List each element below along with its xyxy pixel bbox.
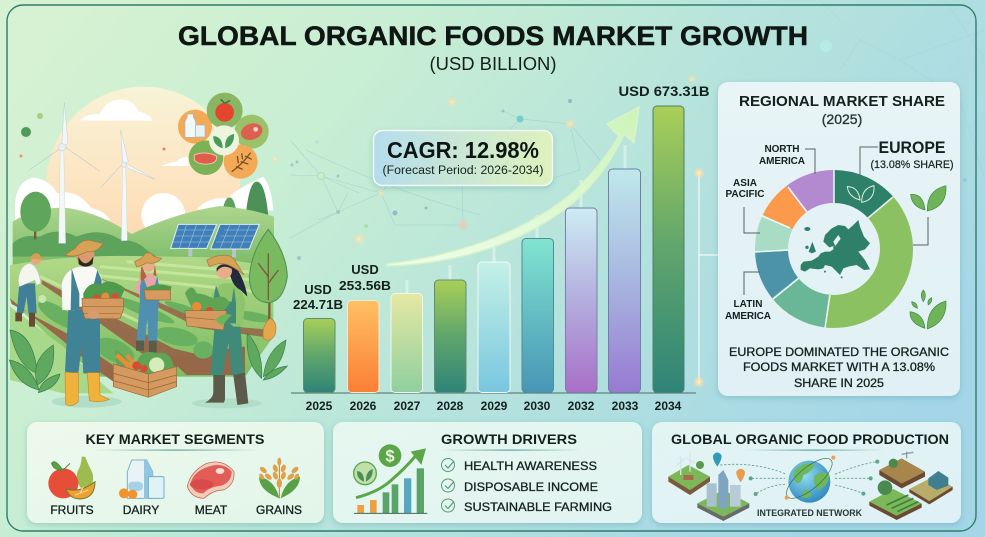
year labels: 2026 [350,399,377,413]
icon: steak right [239,121,265,143]
subtitle: (USD BILLION) [430,54,556,74]
solar panels [171,224,259,257]
donut separators [755,170,893,328]
value label 2034: USD 673.31B [618,83,710,99]
bar 2033 [608,169,640,392]
panel: regional market share [718,82,960,396]
panel: growth drivers [333,422,642,523]
bar chart [291,83,710,413]
icon: leaves upper right [911,186,946,211]
year labels: 2029 [481,399,508,413]
icon: milk [185,114,205,137]
icon: Europe map [801,220,870,278]
icon: wheat [232,153,252,172]
label: dairy: DAIRY [123,503,159,517]
label: grains: GRAINS [256,503,302,517]
bar 2025 [304,318,335,392]
lower-left meadow [10,307,113,393]
crop field [10,256,273,377]
tile: lower crop field [869,480,922,520]
icon: apple [215,99,234,122]
panel heading: GLOBAL ORGANIC FOOD PRODUCTION [671,432,949,447]
icon: leaves lower right [910,290,946,329]
driver: disposable income: DISPOSABLE INCOME [464,480,598,494]
forecast period: (Forecast Period: 2026-2034) [382,165,544,177]
label: North America [759,144,805,167]
CAGR value: CAGR: 12.98% [387,137,539,163]
wind turbine 2 [101,130,155,241]
farmer: woman center [134,253,172,352]
hills [13,206,274,267]
title: GLOBAL ORGANIC FOODS MARKET GROWTH [178,21,808,51]
bar 2028 [434,280,466,392]
donut chart [772,186,896,312]
CAGR callout [374,130,552,186]
panel heading: GROWTH DRIVERS [441,432,577,447]
label: Asia Pacific: PACIFIC [726,189,764,200]
label: Latin America: AMERICA [725,311,771,322]
label: North America: NORTH [764,144,800,155]
year labels: 2032 [568,399,595,413]
icon: blue pin [713,452,722,467]
label: meat: MEAT [195,503,228,517]
value label 2026: USD [351,262,379,277]
year labels: 2025 [306,399,333,413]
clouds and sun [15,99,273,237]
label: Asia Pacific [726,178,764,200]
icon: growth chart: $ [385,447,395,466]
value label 2026 [339,262,391,293]
label: Europe: EUROPE [878,139,946,157]
year labels [306,399,682,413]
growth arrow [387,107,639,266]
panel heading: REGIONAL MARKET SHARE [739,93,945,110]
small dots near illustration [20,113,166,158]
year labels: 2028 [437,399,464,413]
leader lines [744,147,928,295]
year labels: 2030 [524,399,551,413]
tile: left farm with turbines [668,452,710,495]
panel heading: KEY MARKET SEGMENTS [86,432,264,447]
label: Latin America [725,299,771,322]
panel statement: SHARE IN 2025 [794,376,884,390]
panel: global organic food production [652,422,961,523]
icon: leaf in Europe segment [847,186,874,202]
vegetable rows [34,293,274,369]
decorative connector line with glowing nodes [693,167,718,388]
tile: barn farm [909,471,953,504]
icon: growth chart [354,444,427,513]
driver: sustainable farming: SUSTAINABLE FARMING [464,500,612,514]
bar 2026 [348,300,379,392]
value label 2026: 253.56B [339,278,391,293]
tile: city [697,470,749,521]
farmer: man with crate [52,240,125,408]
soil rows [10,277,273,382]
value label 2025 [293,282,343,312]
label: fruits: FRUITS [50,503,94,517]
bar 2027 [391,294,422,392]
panel statement [729,345,949,390]
foreground tree [249,229,287,330]
bar 2030 [522,238,554,392]
network pattern background [264,0,985,260]
label: Asia Pacific: ASIA [733,178,757,189]
panel year: (2025) [822,111,862,127]
icon: orange pin [736,469,745,482]
label: Latin America: LATIN [734,299,762,310]
value label 2025: USD [304,282,332,297]
panel: key market segments [27,422,324,523]
bar 2029 [478,262,510,392]
dashed connections [720,462,877,493]
illustration: organic farm landscape [9,87,287,408]
label: Europe share: (13.08% SHARE) [870,159,954,171]
year labels: 2033 [612,399,639,413]
foreground leaves left [9,330,60,393]
bar glows [407,145,625,293]
foreground leaves right [247,318,287,380]
network diagram [668,452,953,521]
farmer: woman right [185,255,262,408]
icon: grains [258,458,300,498]
label: North America: AMERICA [759,156,805,167]
icon: fruits [48,457,95,499]
icon: meat [187,462,234,498]
food icon cluster [178,93,269,179]
wind turbine 1 [28,103,100,243]
year labels: 2027 [394,399,421,413]
vegetable crate [113,350,177,397]
tile: top right farm [879,452,925,488]
sun halo [46,86,240,234]
panel statement: EUROPE DOMINATED THE ORGANIC [729,345,949,359]
left tree [20,192,51,239]
driver: health awareness: HEALTH AWARENESS [464,459,597,473]
background trees [220,182,269,230]
chart axis [291,392,696,394]
farmer: back [15,253,46,327]
diagram caption: INTEGRATED NETWORK [757,508,862,518]
globe [781,452,838,505]
icon: dairy [119,460,164,499]
node dots [749,460,879,496]
panel statement: FOODS MARKET WITH A 13.08% [743,360,935,374]
bar 2034 [653,106,684,392]
year labels: 2034 [655,399,682,413]
icon: leaf [213,134,234,148]
bar 2032 [566,208,597,392]
icon: steak left [194,153,217,164]
value label 2025: 224.71B [293,297,343,312]
